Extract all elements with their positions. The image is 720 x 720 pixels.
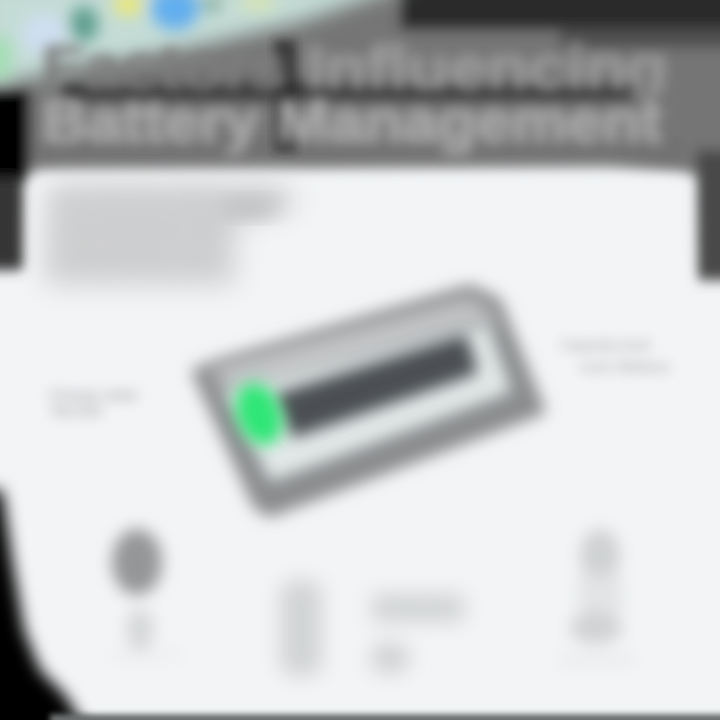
battery: inner face [230, 328, 508, 478]
battery: outer case [197, 290, 540, 512]
factor: charging label [370, 594, 464, 674]
factor: storage icon and label [560, 529, 635, 665]
header photo strip with coloured spots [0, 0, 420, 86]
bottom left dark corner [0, 490, 92, 720]
title: Battery Management [42, 88, 662, 155]
callout label right: Capacity level [560, 337, 650, 354]
factor: charging label: Charging habits [372, 602, 457, 619]
intro text block: Key factors affect how [46, 191, 282, 213]
battery: upper bevel [210, 296, 500, 402]
intro text block [45, 184, 300, 285]
title: Factors Influencing [42, 34, 668, 101]
battery: green charge cell [227, 376, 291, 452]
intro text block: long batteries last [46, 219, 227, 241]
bottom edge bar [50, 714, 720, 720]
battery illustration [197, 290, 540, 512]
title [42, 34, 668, 155]
callout label left: level [52, 403, 102, 420]
callout label right: over lifetime [580, 359, 670, 376]
factor: temperature icon and label [110, 529, 180, 660]
callout label right [560, 337, 670, 376]
intro text block: in everyday use [46, 247, 216, 269]
callout label left: Charge state [48, 387, 138, 404]
battery: dark charge bar [280, 340, 472, 432]
callout label left [48, 387, 138, 420]
background: dark header and edges [0, 0, 720, 280]
factor: usage icon and label [280, 580, 322, 676]
vertical dark streak in header [274, 40, 296, 152]
main light panel [0, 168, 720, 720]
